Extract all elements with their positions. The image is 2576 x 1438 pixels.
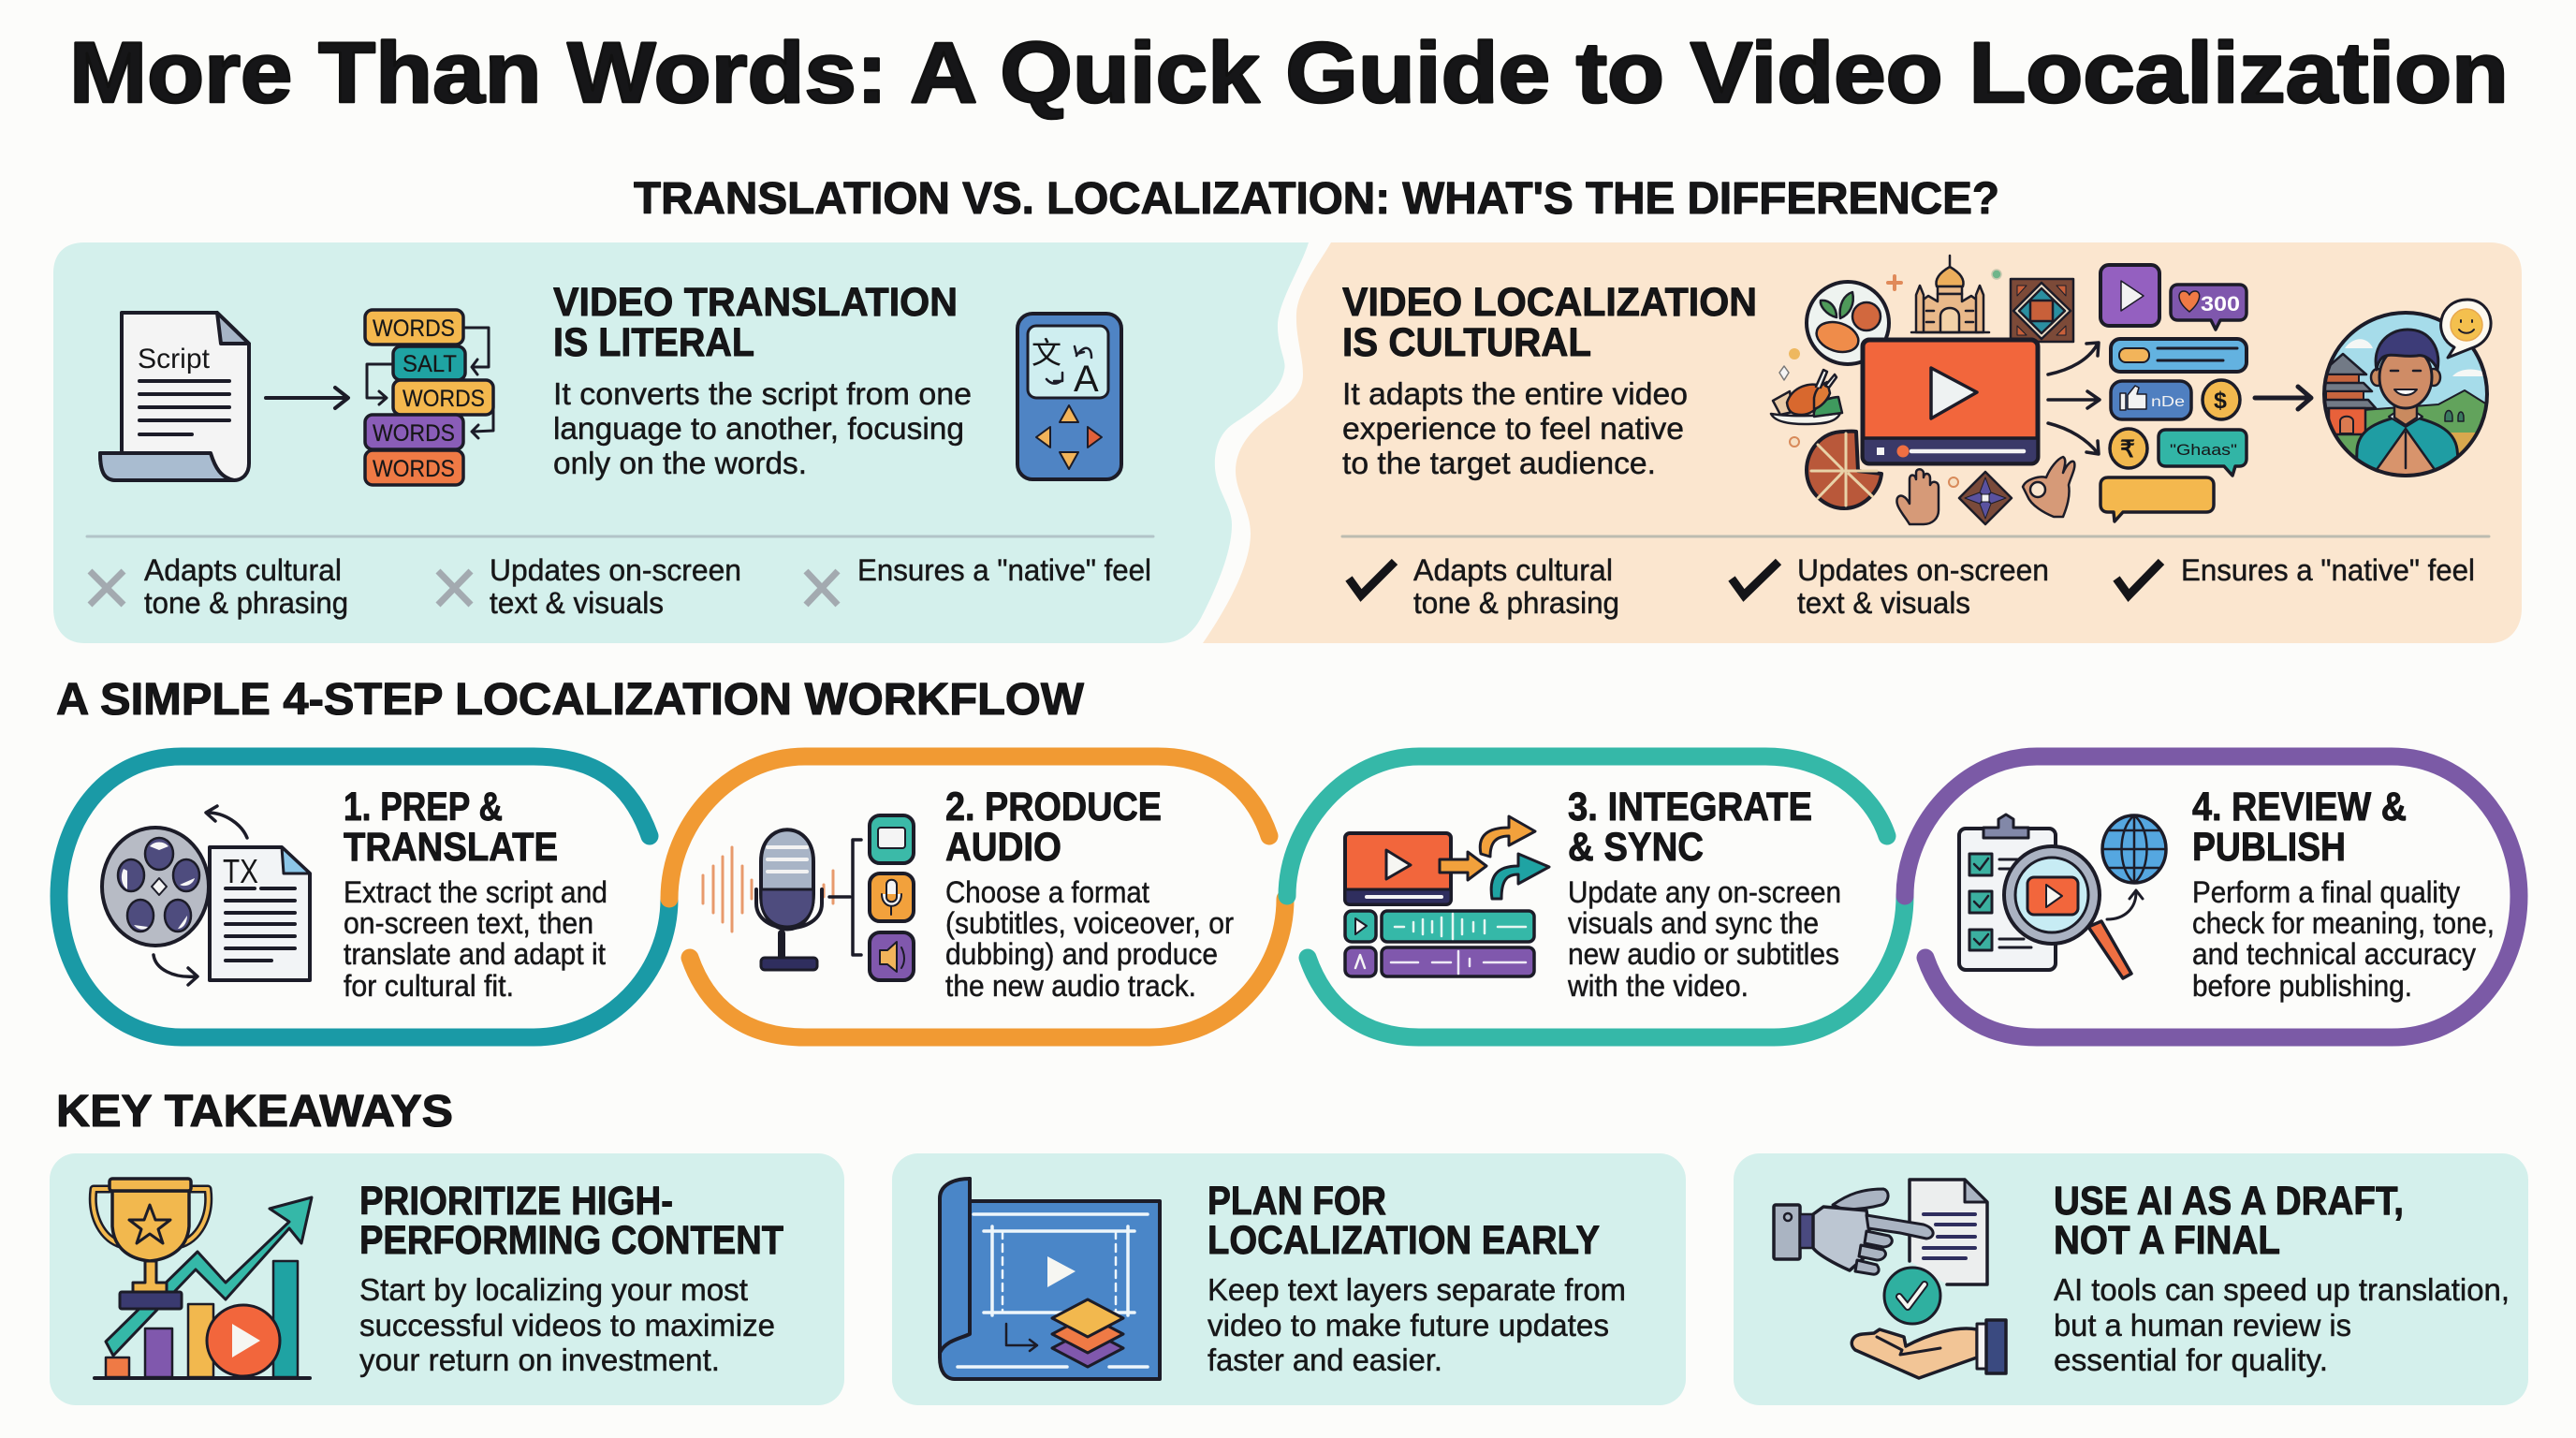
panel: video localization [1203,242,2522,643]
icon: microphone and formats [703,815,914,980]
text: step 1: on-screen text, then [344,906,593,940]
icon: trophy and growth chart [93,1179,312,1378]
text: card 3: essential for quality. [2054,1343,2328,1377]
text: step 3: with the video. [1567,969,1749,1003]
text: card 2: faster and easier. [1208,1343,1442,1377]
list: translation misses: Adapts cultural [144,553,342,587]
icon: pizza [1807,432,1881,508]
icon: diamond ornament [1959,472,2012,524]
text: step 3: Update any on-screen [1568,875,1841,909]
icon: like button [2111,381,2191,419]
heading: video translation: VIDEO TRANSLATION [553,280,958,325]
list: translation misses: Updates on-screen [490,553,741,587]
icon: translator device [1017,314,1121,479]
text: step 1: for cultural fit. [344,969,514,1003]
icon: word stack: WORDS [373,456,455,482]
panel: prioritize high-performing content [50,1153,844,1405]
icon: film reel and document [102,806,310,985]
divider [87,536,1153,537]
list: translation misses: text & visuals [490,586,664,620]
icon: word stack [365,310,493,485]
icon: ok hand [2023,457,2074,517]
heading: step 1: TRANSLATE [344,825,558,870]
text: translation description [553,376,972,480]
icon: word stack: SALT [402,351,457,377]
heading: video localization [1342,280,1757,365]
icon: sparkles [1779,270,2001,487]
icon: checklist magnifier and globe [1959,814,2166,978]
icon: palace [1911,256,1989,332]
heading: step 1: 1. PREP & [344,785,503,829]
list: localization delivers: Adapts cultural [1413,553,1613,587]
heading: card 1: PERFORMING CONTENT [359,1218,783,1263]
text: card 2: Keep text layers separate from [1208,1272,1626,1307]
panel: plan for localization early [892,1153,1686,1405]
icon: blueprint with layers [940,1179,1160,1379]
panel: video translation [53,242,1309,643]
heading: card 1 [359,1179,783,1263]
icon: word stack: WORDS [402,386,485,412]
heading: step 4 [2192,785,2407,870]
heading: step 2: AUDIO [945,825,1061,870]
text: step 3: new audio or subtitles [1568,937,1839,971]
list: translation misses: Ensures a "native" feel [857,553,1151,587]
icon: translator device: A [1074,359,1099,400]
text: step 1: Extract the script and [344,875,607,909]
heading: video translation: IS LITERAL [553,320,754,365]
icon: subtitle bar [2111,339,2247,372]
text: step 4: Perform a final quality [2192,875,2460,909]
text: step 4: and technical accuracy [2192,937,2476,971]
icon: like button: nDe [2151,394,2185,410]
text: step 3 [1567,875,1841,1003]
icon: likes bubble: 300 [2201,292,2240,315]
text: translation description: only on the words. [553,446,807,480]
heading: workflow: A SIMPLE 4-STEP LOCALIZATION WORKFLOW [56,675,1085,725]
icon: yellow bubble [2100,477,2214,521]
step 1: prep and translate [59,756,669,1037]
heading: card 2: PLAN FOR [1208,1179,1386,1224]
list: translation misses: tone & phrasing [144,586,348,620]
text: step 1 [344,875,607,1003]
text: step 2: Choose a format [945,875,1149,909]
heading: card 3: NOT A FINAL [2054,1218,2280,1263]
icon: roast chicken [1771,370,1842,424]
text: card 1 [359,1272,775,1377]
heading: step 1 [344,785,558,870]
text: step 2: dubbing) and produce [945,937,1218,971]
heading: step 4: 4. REVIEW & [2192,785,2407,829]
text: card 3: but a human review is [2054,1308,2351,1343]
step 3: integrate and sync [1287,756,1905,1037]
ring: step 3 [1287,756,1905,1037]
heading: video translation [553,280,958,365]
icon: patterned textile [2011,279,2073,342]
text: step 4: before publishing. [2192,969,2412,1003]
text: step 2: (subtitles, voiceover, or [945,906,1234,940]
icon: raised hand [1896,469,1939,524]
icon: script document: Script [138,344,211,374]
icon: dollar coin [2203,380,2240,419]
heading: card 1: PRIORITIZE HIGH- [359,1179,673,1224]
text: localization description [1342,376,1688,480]
icon: native viewer portrait [2320,300,2491,481]
ring: step 1 [59,756,669,1037]
text: localization description: to the target audience. [1342,446,1656,480]
heading: step 4: PUBLISH [2192,825,2346,870]
text: card 2: video to make future updates [1208,1308,1609,1343]
heading: video localization: IS CULTURAL [1342,320,1591,365]
list: localization delivers [1349,553,2475,620]
arrows: video to assets [2048,343,2100,454]
heading: card 2 [1208,1179,1600,1263]
icon: translated bubble: "Ghaas" [2170,441,2237,459]
icon: robot hand, document and human hand [1774,1180,2006,1378]
text: card 1: Start by localizing your most [359,1272,748,1307]
heading: video localization: VIDEO LOCALIZATION [1342,280,1757,325]
text: step 4: check for meaning, tone, [2192,906,2495,940]
heading: step 3 [1568,785,1812,870]
heading: key takeaways: KEY TAKEAWAYS [56,1087,453,1137]
icon: food plate [1807,282,1889,364]
arrow: to audience [2255,387,2311,409]
heading: translation vs localization: TRANSLATION VS. LOCALIZATION: WHAT'S THE DIFFERENCE? [634,174,1999,224]
icon: script document [100,313,249,480]
ring: step 2 [669,756,1285,1037]
text: step 4 [2192,875,2495,1003]
heading: card 2: LOCALIZATION EARLY [1208,1218,1600,1263]
heading: card 3: USE AI AS A DRAFT, [2054,1179,2404,1224]
icon: film reel and document: TX [223,852,258,890]
list: localization delivers: tone & phrasing [1413,586,1619,620]
icon: translated bubble [2159,430,2247,476]
icon: likes bubble [2171,285,2247,330]
heading: card 3 [2054,1179,2404,1263]
icon: word stack: WORDS [373,315,455,342]
text: card 1: successful videos to maximize [359,1308,775,1343]
list: localization delivers: Updates on-screen [1797,553,2049,587]
heading: step 3: 3. INTEGRATE [1568,785,1812,829]
heading: step 3: & SYNC [1568,825,1704,870]
text: card 3: AI tools can speed up translation, [2054,1272,2510,1307]
ring: step 4 [1905,756,2519,1037]
icon: rupee coin: ₹ [2120,436,2135,462]
title: More Than Words: A Quick Guide to Video Localization [69,25,2509,121]
panel: use ai as a draft [1734,1153,2528,1405]
list: localization delivers: text & visuals [1797,586,1970,620]
icon: main video player [1863,340,2038,463]
text: card 2 [1208,1272,1626,1377]
list: localization delivers: Ensures a "native" feel [2181,553,2475,587]
text: translation description: It converts the script from one [553,376,972,411]
heading: step 2 [945,785,1162,870]
icon: translator device: 文 [1032,336,1061,370]
text: translation description: language to another, focusing [553,411,964,446]
text: localization description: experience to feel native [1342,411,1684,446]
text: step 2: the new audio track. [945,969,1196,1003]
heading: step 2: 2. PRODUCE [945,785,1162,829]
list: translation misses [90,553,1151,620]
icon: word stack: WORDS [373,420,455,447]
text: card 3 [2054,1272,2510,1377]
step 2: produce audio [669,756,1285,1037]
text: step 2 [945,875,1234,1003]
step 4: review and publish [1905,756,2519,1037]
text: step 3: visuals and sync the [1568,906,1819,940]
text: localization description: It adapts the entire video [1342,376,1688,411]
divider [1342,536,2489,537]
text: step 1: translate and adapt it [344,937,606,971]
icon: dollar coin: $ [2214,388,2227,414]
icon: video and audio tracks [1345,816,1549,976]
arrow: script to words [266,388,348,408]
icon: purple play tile [2100,265,2159,326]
text: card 1: your return on investment. [359,1343,720,1377]
icon: rupee coin [2110,429,2147,468]
